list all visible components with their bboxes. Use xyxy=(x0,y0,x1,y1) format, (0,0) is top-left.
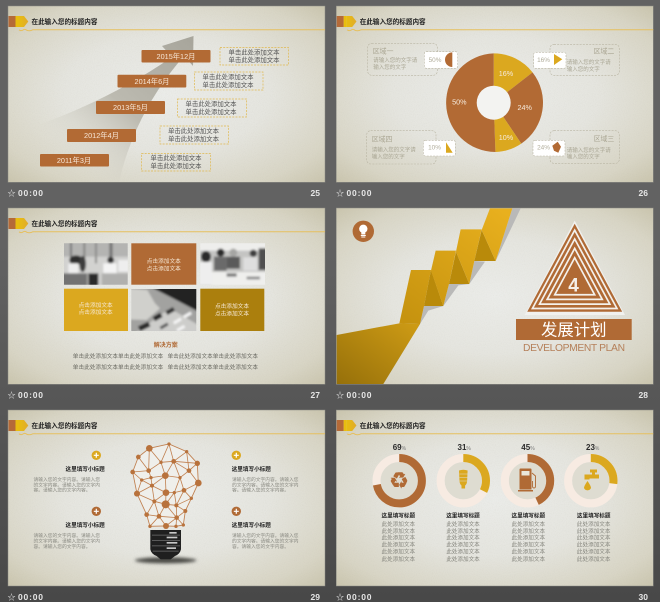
footer: slide 29 xyxy=(8,592,320,602)
growth arrow xyxy=(30,36,194,182)
donut: 69% recycling: 此处添加文本 xyxy=(382,548,415,556)
header: slide 27: 在此输入您的标题内容 xyxy=(32,219,98,228)
photo: calculator xyxy=(131,289,196,331)
tile: dark gold text: 点击添加文本 xyxy=(215,309,249,317)
footer: slide 29: 00:00 xyxy=(18,592,43,602)
donut: 23% water tap: 这里填写标题 xyxy=(577,511,611,519)
donut: 69% recycling: 此处添加文本 xyxy=(382,527,415,535)
timeline bar: 2014: 2014年6月 xyxy=(135,77,169,86)
pie chart: 50% xyxy=(452,98,467,107)
header: slide 25: 在此输入您的标题内容 xyxy=(32,17,98,26)
text block: bottom left: 容。请输入您的文字内容。 xyxy=(34,543,91,550)
panel: slide 30 donut charts xyxy=(336,410,653,586)
footer: slide 27: ☆ xyxy=(8,391,16,400)
note box: 2014: 单击此处添加文本 xyxy=(202,80,254,89)
timeline bar: 2011 xyxy=(40,154,109,166)
note box: 2012: 单击此处添加文本 xyxy=(168,134,220,143)
timeline bar: 2015 xyxy=(142,50,210,62)
panel: slide 26 pie chart xyxy=(336,6,653,182)
donut: 23% water tap: 此处添加文本 xyxy=(577,534,611,542)
tile: brown text: 点击添加文本 xyxy=(147,264,181,272)
text block: solution: 单击此处添加文本单击此处添加文本 xyxy=(168,352,258,360)
callout: region 4: 输入您的文字 xyxy=(372,153,405,161)
footer: slide 30 xyxy=(336,592,648,602)
donut: 45% fuel pump: 此处添加文本 xyxy=(512,555,545,563)
header: slide 25 xyxy=(8,16,325,31)
tile: brown text: 点击添加文本 xyxy=(147,257,181,265)
pie chart: 24% xyxy=(518,103,532,112)
text block: bottom right: 的文字内容。请输入您的文字内 xyxy=(232,538,299,544)
callout: region 2: 16% xyxy=(537,57,550,64)
photo: team at table xyxy=(200,243,265,285)
title band xyxy=(516,319,632,340)
footer: slide 26 xyxy=(336,188,648,198)
donut: 23% water tap: 此处添加文本 xyxy=(577,541,611,549)
text block: solution xyxy=(73,341,258,371)
text block: solution: 单击此处添加文本单击此处添加文本 xyxy=(73,352,164,360)
panel: slide 27 photo grid xyxy=(8,208,325,384)
donut: 31% energy bulb: 此处添加文本 xyxy=(446,534,480,542)
panel: slide 28 section cover xyxy=(336,208,653,384)
callout: region 3: 输入您的文字 xyxy=(567,153,600,161)
text block: bottom right: 这里填写小标题 xyxy=(232,521,271,529)
header: slide 30 xyxy=(337,420,653,435)
footer: slide 28 xyxy=(336,390,648,400)
pie chart: 16% xyxy=(499,69,514,78)
note box: 2015: 单击此处添加文本 xyxy=(228,47,280,56)
footer: slide 30: 00:00 xyxy=(346,592,372,602)
note box: 2014 xyxy=(194,72,263,90)
note box: 2012: 单击此处添加文本 xyxy=(168,126,220,135)
triangle emblem with number 4 xyxy=(524,220,625,315)
donut: 23% water tap: 23% xyxy=(586,443,600,452)
footer: slide 30: ☆ xyxy=(336,593,344,602)
donut: 31% energy bulb: 此处添加文本 xyxy=(446,520,480,528)
callout: region 4: 请输入您的文字请 xyxy=(372,146,416,154)
donut: 23% water tap: 此处添加文本 xyxy=(577,520,611,528)
text block: top right xyxy=(232,451,299,494)
footer: slide 26: ☆ xyxy=(336,189,344,198)
callout: region 1: 请输入您的文字请 xyxy=(373,56,418,64)
header: slide 30: 在此输入您的标题内容 xyxy=(360,421,426,430)
note box: 2013: 单击此处添加文本 xyxy=(185,107,237,116)
panel: slide 25 timeline xyxy=(8,6,325,182)
donut: 23% water tap xyxy=(568,443,614,563)
tile: yellow text: 点击添加文本 xyxy=(79,301,113,309)
donut: 69% recycling xyxy=(376,443,422,563)
timeline bar: 2015: 2015年12月 xyxy=(157,52,195,61)
text block: solution: 单击此处添加文本单击此处添加文本 xyxy=(168,363,258,371)
pie chart: 10% xyxy=(499,133,514,142)
triangle emblem with number 4: 4 xyxy=(568,275,579,296)
note box: 2013: 单击此处添加文本 xyxy=(185,99,237,108)
folded ribbon xyxy=(337,208,521,384)
callout: region 4: 10% xyxy=(428,144,441,152)
note box: 2015: 单击此处添加文本 xyxy=(228,55,280,64)
header: slide 26 xyxy=(337,16,653,31)
timeline bar: 2012: 2012年4月 xyxy=(84,131,119,140)
text block: top right: 容。请输入您的文字内容。 xyxy=(232,487,289,494)
text block: top left: 容。请输入您的文字内容。 xyxy=(34,487,91,494)
donut: 23% water tap: 此处添加文本 xyxy=(577,527,611,535)
donut: 45% fuel pump: 45% xyxy=(521,443,535,452)
tile: yellow text: 点击添加文本 xyxy=(79,308,113,316)
header: slide 29: 在此输入您的标题内容 xyxy=(32,421,98,430)
footer: slide 27 xyxy=(8,390,320,400)
icon: plus brown xyxy=(92,507,101,516)
panel: slide 29 bulb network xyxy=(8,410,325,586)
donut: 31% energy bulb: 31% xyxy=(458,443,471,452)
text block: top left: 的文字内容。请输入您的文字内 xyxy=(34,481,100,488)
text block: bottom left: 这里填写小标题 xyxy=(66,521,105,529)
photo: meeting on sofas xyxy=(64,243,128,285)
text block: top left xyxy=(34,451,105,494)
donut: 45% fuel pump xyxy=(505,443,550,563)
callout: region 2 xyxy=(534,44,619,75)
donut: 31% energy bulb xyxy=(441,443,486,563)
note box: 2015 xyxy=(220,47,288,65)
note box: 2011 xyxy=(142,153,210,171)
callout: region 4: 区域四 xyxy=(372,134,392,144)
donut: 23% water tap: 此处添加文本 xyxy=(577,555,611,563)
text block: bottom right xyxy=(232,507,299,550)
note box: 2011: 单击此处添加文本 xyxy=(150,161,202,170)
callout: region 3: 请输入您的文字请 xyxy=(567,146,611,154)
footer: slide 28: 00:00 xyxy=(346,390,372,400)
callout: region 1: 区域一 xyxy=(373,46,393,56)
icon: plus yellow right xyxy=(232,451,241,460)
title band: 发展计划 xyxy=(541,322,607,340)
timeline bar: 2013: 2013年5月 xyxy=(113,103,148,112)
donut: 23% water tap: 此处添加文本 xyxy=(577,548,611,556)
callout: region 3: 24% xyxy=(537,144,550,152)
header: slide 26: 在此输入您的标题内容 xyxy=(360,17,426,26)
footer: slide 29: ☆ xyxy=(8,593,16,602)
text block: top right: 的文字内容。请输入您的文字内 xyxy=(232,481,299,488)
callout: region 3 xyxy=(533,131,619,163)
donut: 69% recycling: 此处添加文本 xyxy=(382,520,415,528)
text block: solution: 单击此处添加文本单击此处添加文本 xyxy=(73,363,164,371)
note box: 2013 xyxy=(178,99,246,117)
donut: 69% recycling: 此处添加文本 xyxy=(382,541,415,549)
donut: 31% energy bulb: 此处添加文本 xyxy=(446,548,480,556)
donut: 69% recycling: 此处添加文本 xyxy=(382,555,415,563)
timeline bar: 2014 xyxy=(118,75,186,88)
text block: solution: 解决方案 xyxy=(154,341,178,349)
donut: 69% recycling: ♻ xyxy=(389,469,409,494)
text block: bottom right: 请输入您的文字内容。请输入您 xyxy=(232,532,299,539)
footer: slide 25: ☆ xyxy=(8,189,16,198)
footer: slide 30: 30 xyxy=(638,592,648,602)
illustration: network light bulb xyxy=(130,442,202,563)
timeline bar: 2012 xyxy=(67,129,136,142)
footer: slide 25 xyxy=(8,188,320,198)
footer: slide 26: 00:00 xyxy=(346,188,372,198)
note box: 2012 xyxy=(160,126,228,144)
header: slide 29 xyxy=(8,420,325,435)
footer: slide 29: 29 xyxy=(310,592,320,602)
donut: 31% energy bulb: 此处添加文本 xyxy=(446,555,480,563)
timeline bar: 2011: 2011年3月 xyxy=(57,156,91,165)
donut: 45% fuel pump: 此处添加文本 xyxy=(512,527,545,535)
callout: region 2: 请输入您的文字请 xyxy=(567,58,611,66)
donut: 45% fuel pump: 这里填写标题 xyxy=(512,511,545,519)
callout: region 3: 区域三 xyxy=(594,134,614,143)
donut: 31% energy bulb: 这里填写标题 xyxy=(446,511,480,519)
tile: brown text xyxy=(131,243,196,285)
footer: slide 26: 26 xyxy=(638,188,648,198)
callout: region 1: 输入您的文字 xyxy=(373,63,407,71)
text block: bottom right: 容。请输入您的文字内容。 xyxy=(232,543,289,550)
text block: top left: 请输入您的文字内容。请输入您 xyxy=(34,476,100,483)
icon: plus brown right xyxy=(232,507,241,516)
donut: 45% fuel pump: 此处添加文本 xyxy=(512,541,545,549)
icon: plus yellow xyxy=(92,451,101,460)
text block: bottom left: 的文字内容。请输入您的文字内 xyxy=(34,538,100,544)
text block: top left: 这里填写小标题 xyxy=(66,465,105,473)
callout: region 2: 输入您的文字 xyxy=(567,65,600,73)
tile: dark gold text xyxy=(200,289,264,331)
timeline bar: 2013 xyxy=(96,101,165,114)
text block: bottom left: 请输入您的文字内容。请输入您 xyxy=(34,532,100,539)
footer: slide 25: 25 xyxy=(310,188,320,198)
callout: region 2: 区域二 xyxy=(594,46,614,56)
donut: 69% recycling: 这里填写标题 xyxy=(382,511,415,519)
donut: 45% fuel pump: 此处添加文本 xyxy=(512,548,545,556)
header: slide 27 xyxy=(8,218,325,233)
footer: slide 27: 00:00 xyxy=(18,390,43,400)
donut: 45% fuel pump: 此处添加文本 xyxy=(512,534,545,542)
footer: slide 28: ☆ xyxy=(336,391,344,400)
pie chart xyxy=(446,53,543,152)
donut: 69% recycling: 69% xyxy=(393,443,407,452)
tile: yellow text xyxy=(64,289,128,331)
callout: region 1 xyxy=(368,43,458,75)
text block: top right: 请输入您的文字内容。请输入您 xyxy=(232,476,299,483)
callout: region 1: 50% xyxy=(429,57,442,64)
note box: 2014: 单击此处添加文本 xyxy=(202,72,254,81)
donut: 31% energy bulb: 此处添加文本 xyxy=(446,541,480,549)
footer: slide 27: 27 xyxy=(310,390,320,400)
donut: 31% energy bulb: 此处添加文本 xyxy=(446,527,480,535)
note box: 2011: 单击此处添加文本 xyxy=(150,153,202,162)
text block: top right: 这里填写小标题 xyxy=(232,465,271,473)
callout: region 4 xyxy=(367,131,455,164)
subtitle: DEVELOPMENT PLAN xyxy=(523,343,625,354)
icon: light bulb badge xyxy=(353,221,374,242)
donut: 69% recycling: 此处添加文本 xyxy=(382,534,415,542)
donut: 45% fuel pump: 此处添加文本 xyxy=(512,520,545,528)
footer: slide 28: 28 xyxy=(638,390,648,400)
text block: bottom left xyxy=(34,507,105,550)
tile: dark gold text: 点击添加文本 xyxy=(215,302,249,310)
footer: slide 25: 00:00 xyxy=(18,188,43,198)
